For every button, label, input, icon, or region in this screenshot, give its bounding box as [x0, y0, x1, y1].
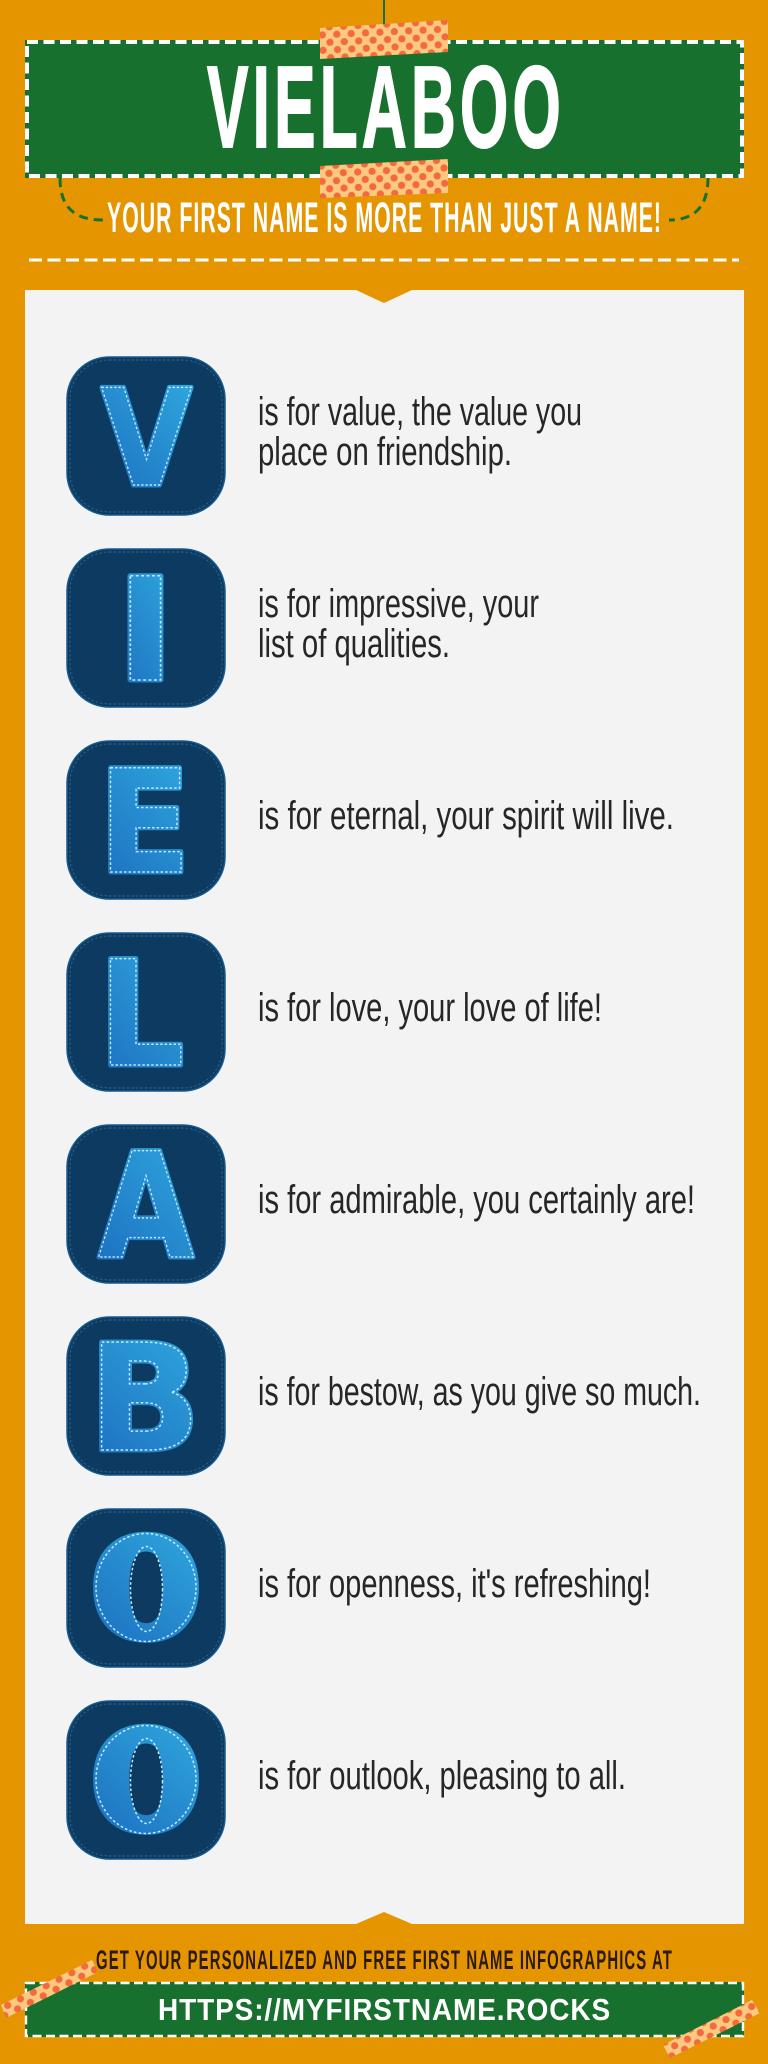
icon: letter A: A [98, 1122, 194, 1292]
footer banner [25, 1982, 744, 2037]
icon: letter E: E [98, 739, 191, 906]
icon: letter E [67, 739, 225, 906]
icon: letter I [67, 547, 225, 714]
row: O [67, 1509, 651, 1667]
panel: letters [25, 290, 744, 1924]
icon: letter B: B [88, 1313, 201, 1485]
icon: letter V [67, 357, 225, 517]
icon: letter V: V [101, 361, 192, 517]
dashed divider [29, 258, 739, 262]
icon: letter I: I [116, 547, 176, 714]
icon: letter E: E [98, 739, 191, 906]
tape: top [320, 20, 448, 59]
text: L: is for love, your love of life! [258, 986, 602, 1030]
row: O second [67, 1701, 626, 1859]
row: B [67, 1313, 701, 1485]
row: A [67, 1122, 695, 1292]
tape: footer right [663, 2000, 760, 2058]
header banner [25, 40, 744, 178]
subtitle connector: right [669, 178, 708, 220]
icon: letter V: V [101, 361, 192, 517]
text: I: list of qualities. [258, 622, 450, 666]
tape: footer left [1, 1960, 98, 2018]
footer url: HTTPS://MYFIRSTNAME.ROCKS [158, 1993, 611, 2027]
text: V: is for value, the value you [258, 390, 582, 434]
row: I [67, 547, 539, 714]
row: L [67, 930, 602, 1100]
icon: letter I: I [116, 547, 176, 714]
hanging line [383, 0, 385, 28]
subtitle connector: left [60, 178, 103, 220]
icon: letter L: L [98, 930, 184, 1100]
icon: letter L: L [98, 930, 184, 1100]
icon: letter L [67, 930, 225, 1100]
icon: letter A: A [98, 1122, 194, 1292]
row: E [67, 739, 674, 906]
text: O second: is for outlook, pleasing to all. [258, 1754, 626, 1798]
icon: letter O second: O [94, 1704, 199, 1858]
icon: letter B: B [88, 1313, 201, 1485]
row: V [67, 357, 582, 517]
icon: letter O: O [94, 1512, 199, 1666]
text: I: is for impressive, your [258, 582, 539, 626]
text: V: place on friendship. [258, 430, 512, 474]
tape: bottom [320, 159, 448, 198]
